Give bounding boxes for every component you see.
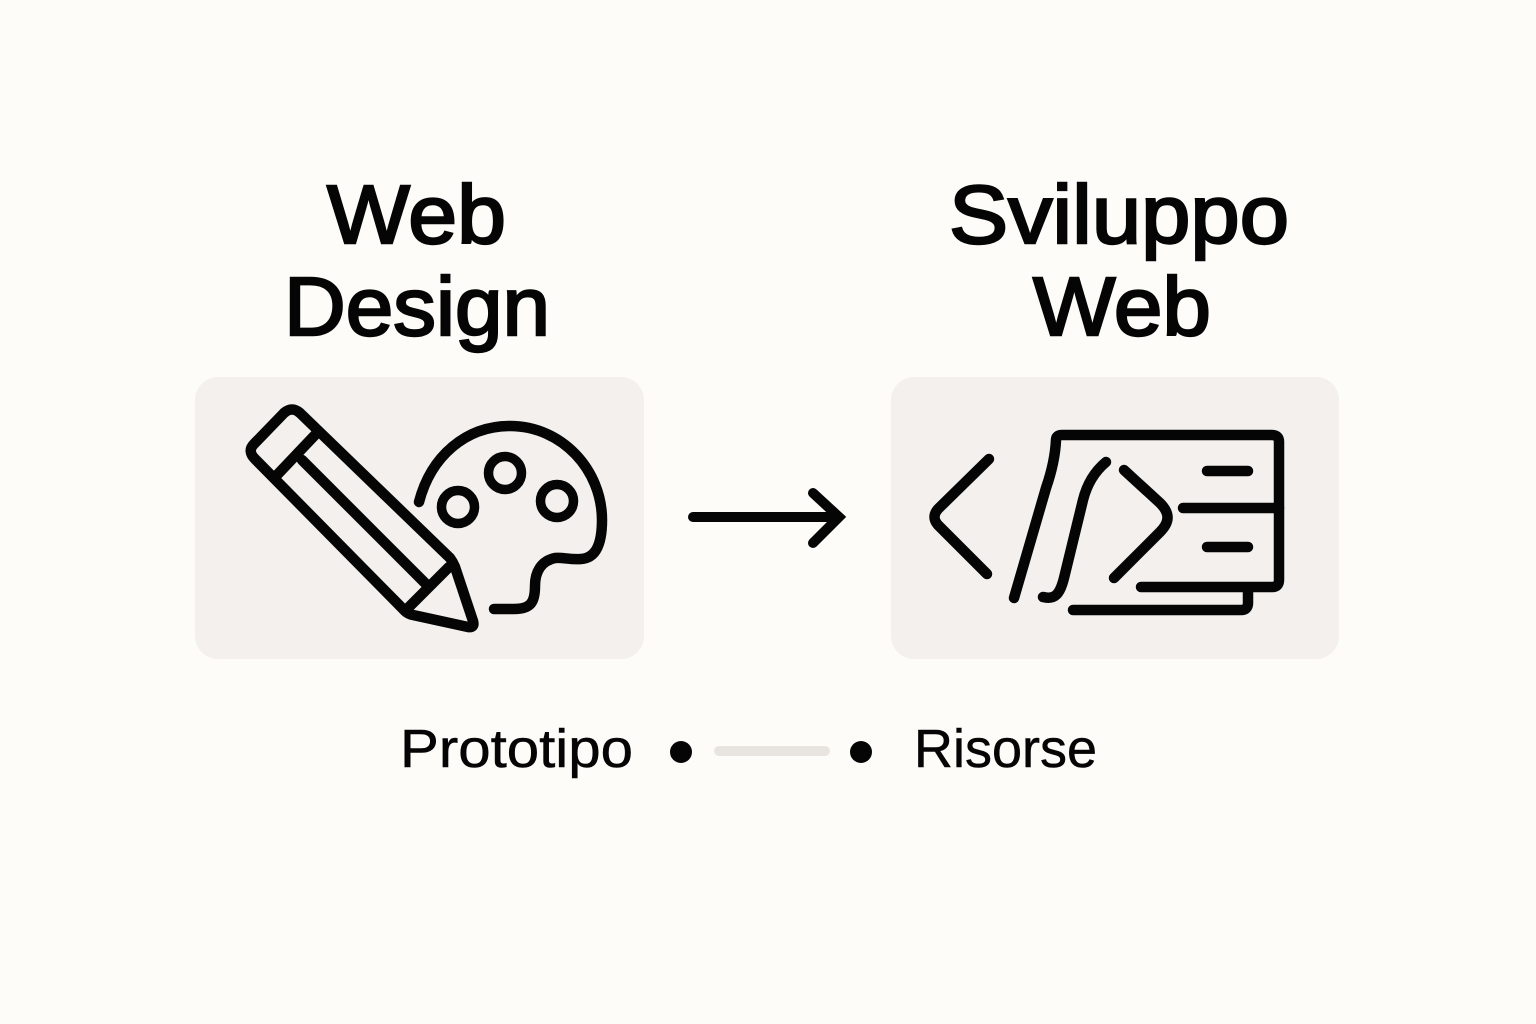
connector: dots and faded line <box>670 741 872 763</box>
icon: pencil <box>251 410 473 627</box>
heading: Web Design <box>284 168 550 353</box>
heading: Web Design: Design <box>284 260 550 353</box>
arrow: from design to development <box>693 493 839 543</box>
heading: Sviluppo Web: Sviluppo <box>949 168 1289 261</box>
heading: Sviluppo Web <box>949 168 1289 353</box>
panel: web development <box>891 377 1339 659</box>
label: Prototipo: Prototipo <box>400 719 633 779</box>
label: Risorse: Risorse <box>914 719 1097 779</box>
heading: Sviluppo Web: Web <box>1033 260 1211 353</box>
panel: web design <box>195 377 644 659</box>
heading: Web Design: Web <box>327 168 506 261</box>
icon: palette <box>419 426 602 609</box>
icon: code tag and window <box>934 435 1279 610</box>
